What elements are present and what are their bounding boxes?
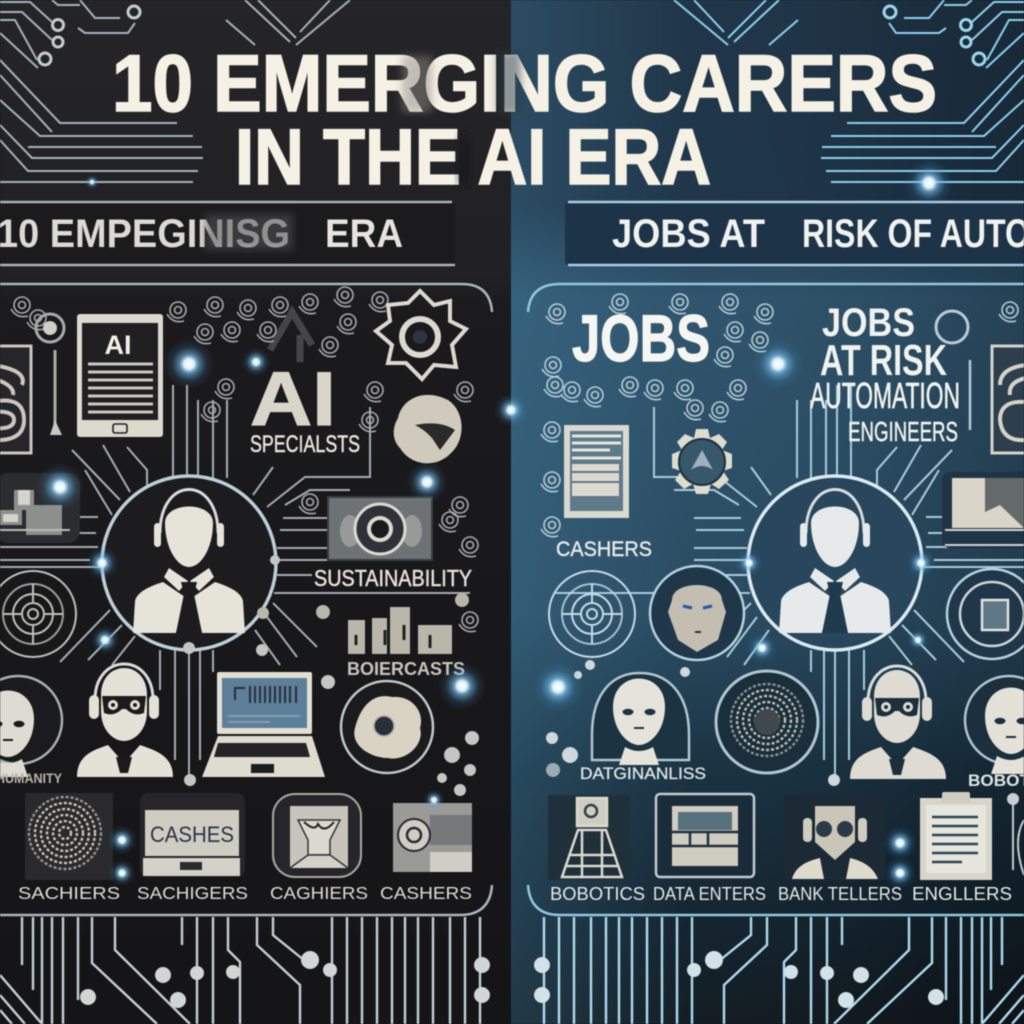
heading: AI specialists: SPECIALSTS	[250, 431, 360, 458]
heading: jobs at risk automation engineers	[810, 301, 960, 447]
icon: bank teller	[784, 795, 885, 880]
right panel: doodle cluster	[541, 294, 1018, 537]
icon: AI tablet	[77, 314, 163, 437]
icon: sustainability monitor	[328, 497, 432, 560]
portrait: job at risk	[748, 476, 922, 650]
left bottom labels: CASHERS	[380, 883, 472, 903]
icon: machine right	[942, 472, 1024, 548]
heading: AI specialists: AI	[250, 357, 336, 442]
heading: jobs at risk automation engineers: AT RISK	[820, 336, 947, 385]
icon: clipboard	[920, 792, 1024, 880]
right bottom labels: BOBOTICS	[550, 884, 645, 904]
icon: circuit ring right-left	[549, 571, 635, 657]
icon: cashiers laptop	[140, 793, 245, 877]
heading: jobs at risk automation engineers: ENGINEERS	[848, 416, 958, 447]
icon: fingerprint document left	[0, 346, 31, 453]
glowing nodes	[36, 159, 953, 889]
title	[112, 39, 937, 201]
icon: fingerprint document right	[992, 346, 1024, 453]
right background	[511, 0, 1024, 1024]
icon: face in ring	[650, 566, 744, 660]
icon: robot	[548, 795, 630, 880]
icon: fingerprint ring	[716, 671, 818, 773]
icon: pictogram frame	[273, 794, 361, 877]
right bottom labels: DATA ENTERS	[653, 884, 766, 904]
heading: jobs: JOBS	[572, 301, 710, 375]
label: forecasters: BOIERCASTS	[347, 659, 465, 679]
icon: document	[564, 425, 629, 518]
icon: circuit ring left	[0, 571, 76, 657]
icon: abstract blob head	[394, 395, 462, 463]
left bottom labels	[18, 883, 472, 903]
left panel nodes	[183, 555, 479, 796]
heading: AI specialists	[250, 357, 360, 458]
icon: blob in ring	[341, 681, 433, 773]
subtitle bar: emerging	[0, 202, 455, 265]
icon: headphone figure right	[850, 666, 946, 779]
left bottom labels: SACHIGERS	[137, 883, 248, 903]
label: cashiers: CASHERS	[556, 538, 652, 561]
icon: gear warning	[672, 429, 732, 494]
title: 10 EMERGING CARERS	[112, 39, 937, 129]
panel: right outline	[528, 284, 1024, 915]
icon: laptop	[202, 672, 325, 777]
bottom-right circuit traces	[534, 917, 1024, 1024]
icon: bald face right	[965, 676, 1024, 774]
icon: document in ring right	[947, 569, 1024, 659]
subtitle bar: jobs at risk: JOBS AT	[612, 212, 765, 256]
label: sustainability: SUSTAINABILITY	[314, 565, 472, 591]
icon: settings gear outline	[376, 291, 466, 379]
left panel circuit traces	[0, 385, 470, 776]
subtitle bar: emerging: 10 EMPEGINISG	[0, 212, 290, 256]
right panel circuit traces	[554, 385, 1024, 776]
top-right circuit traces	[674, 0, 1024, 182]
icon: cashiers laptop: CASHES	[150, 822, 234, 847]
icon: data entry machine	[656, 794, 754, 877]
panel: left outline	[0, 284, 492, 915]
icon: bar chart	[257, 593, 469, 654]
left bottom labels: CAGHIERS	[270, 883, 368, 903]
left bottom labels: SACHIERS	[18, 883, 120, 903]
icon: machinery block left	[0, 473, 80, 543]
icon: bald face in arch	[592, 673, 689, 765]
icon: fingerprint square left	[25, 793, 113, 880]
right bottom labels: BANK TELLERS	[778, 884, 902, 904]
label: data analysts: DATGINANLISS	[580, 764, 706, 783]
right bottom labels: ENGLLERS	[912, 884, 1012, 904]
right panel nodes	[546, 660, 840, 786]
subtitle bar: emerging: ERA	[325, 212, 403, 256]
right bottom labels	[550, 884, 1012, 904]
left panel: doodle cluster	[11, 287, 478, 632]
heading: jobs at risk automation engineers: JOBS	[822, 301, 915, 345]
top-left circuit traces	[0, 0, 350, 182]
icon: headphone figure left	[77, 664, 173, 777]
icon: AI tablet: AI	[104, 330, 132, 360]
bottom-left circuit traces	[0, 917, 490, 1024]
icon: bald face left	[0, 676, 62, 777]
icon: control device	[393, 803, 472, 872]
left background	[0, 0, 511, 1024]
title: IN THE AI ERA	[235, 112, 711, 201]
portrait: emerging career	[102, 476, 276, 650]
subtitle bar: jobs at risk	[565, 202, 1024, 265]
